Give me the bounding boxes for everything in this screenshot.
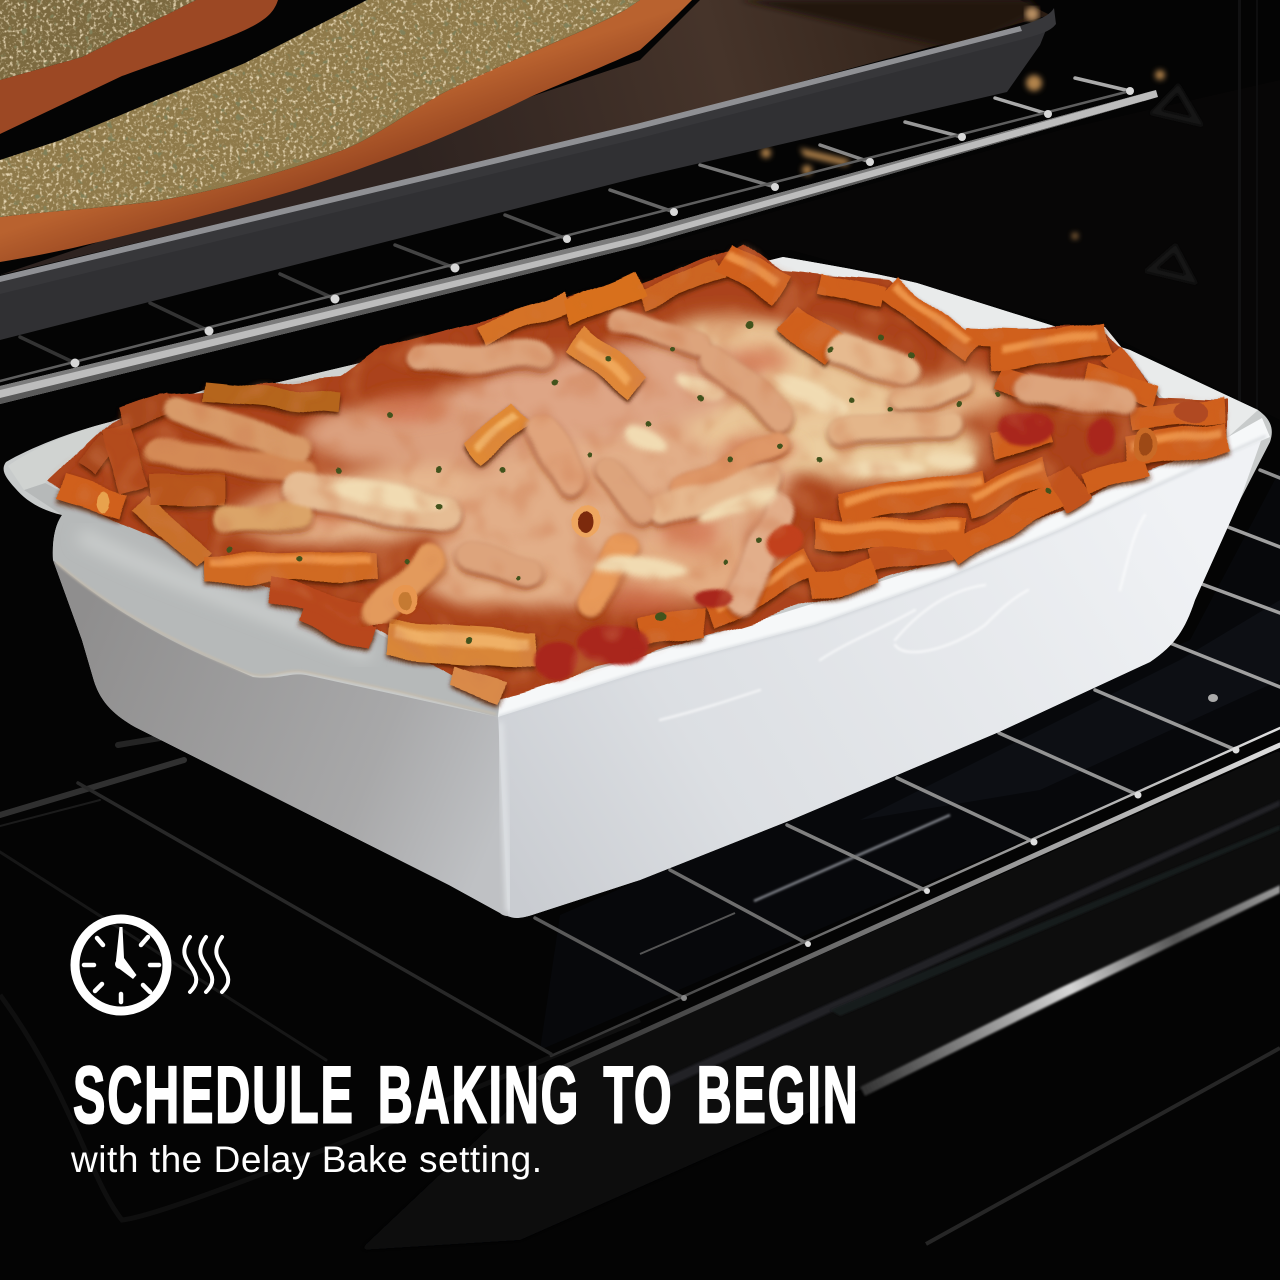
heading: SCHEDULE BAKING TO BEGIN [73, 1051, 860, 1141]
parsley flecks [227, 321, 1053, 643]
bread slice back [0, 0, 278, 134]
mottled sauce shading [45, 243, 1228, 697]
dish right front face [498, 438, 1262, 918]
orange penne tubes [60, 257, 1228, 692]
dish corner highlight [500, 722, 509, 912]
upper rack crossbars [20, 78, 1130, 363]
penne ridge highlights [210, 252, 1222, 644]
penne end openings [98, 400, 1205, 616]
pink sauce tinge in cheese [280, 346, 800, 614]
icon: steam waves [184, 937, 228, 992]
white baking dish [4, 257, 1272, 918]
cheese-coated penne [155, 320, 1122, 612]
tray side wall [0, 25, 1048, 340]
lower tray outline [0, 995, 640, 1220]
dish inner left wall [8, 363, 360, 490]
upper oven rack [0, 78, 1158, 404]
pale cheese highlights [322, 368, 974, 578]
baking tray [0, 0, 1056, 340]
garlic bread slices [0, 0, 692, 262]
door highlight streak [860, 885, 1280, 1096]
upper rack thin rail [0, 91, 1130, 381]
oven wall rack supports [1150, 88, 1198, 280]
melted cheese layer [227, 285, 1010, 649]
rack cap ends [681, 746, 1240, 1001]
oven floor enamel [540, 470, 1280, 1050]
tray interior [0, 0, 1050, 275]
dish rim highlight [498, 418, 1270, 717]
rack front rods [540, 745, 1280, 1078]
baked penne pasta [45, 243, 1228, 697]
tray lip [0, 8, 1056, 294]
bread slice front [0, 0, 692, 262]
dish left front face [53, 560, 508, 916]
icon: clock with steam [75, 919, 228, 1011]
dish back rim [730, 257, 1258, 437]
rack left side rods [0, 760, 184, 815]
tomato sauce patches [531, 410, 1113, 680]
oven door rail and reflections [0, 750, 1280, 1250]
pasta base layer [45, 243, 1228, 697]
upper rack caps [70, 87, 1134, 368]
subheading: with the Delay Bake setting. [70, 1139, 542, 1180]
lower oven rack [0, 470, 1280, 1078]
dish silhouette [4, 257, 1272, 918]
rack crossbars [535, 470, 1280, 998]
dish handle and left rim [24, 483, 500, 717]
upper rack front rod [0, 90, 1158, 404]
dish glossy reflections [660, 515, 1145, 720]
icon: clock face [75, 919, 167, 1011]
orange light glints [761, 70, 1165, 239]
